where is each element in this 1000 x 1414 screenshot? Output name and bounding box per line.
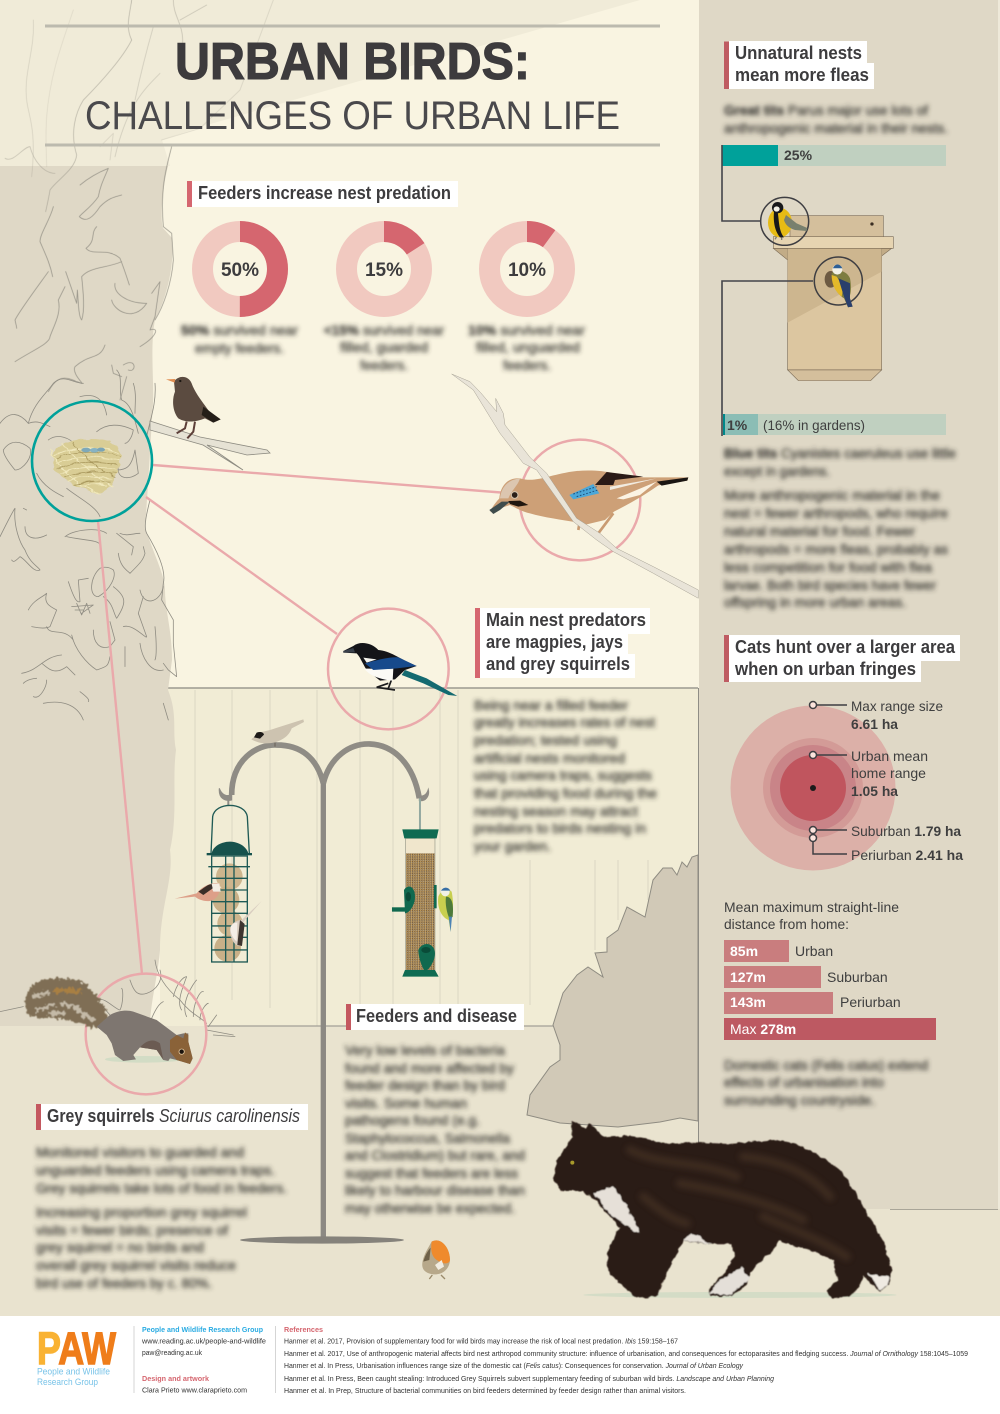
text block: references: Hanmer et al. In Prep, Structure of bacterial communities on bird feeders determined by feeder design rather than animal visitors. (284, 1388, 686, 1395)
heading: cats hunt over a larger area: Cats hunt over a larger area (735, 637, 956, 657)
text block: blue tits: arthropods = more fleas, probably as (724, 541, 948, 557)
text block: references: Hanmer et al. 2017, Use of anthropogenic material affects bird nest arthropod community structure: influence of urbanisation, and consequences for ectoparasites and fledging success. Journal of Ornithology 158:1045–1059 (284, 1351, 968, 1358)
text block: grey squirrels body: unguarded feeders using camera traps. (36, 1162, 275, 1178)
text block: references: Hanmer et al. In Press, Been caught stealing: Introduced Grey Squirrels subvert supplementary feeding of suburban wild birds. Landscape and Urban Planning (284, 1376, 774, 1383)
chart: donut 15% (346, 232, 422, 306)
chart: distance bars: 127m (730, 969, 766, 985)
text block: domestic cats: effects of urbanisation into (724, 1074, 884, 1090)
text block: grey squirrels body: overall grey squirrel visits reduce (36, 1257, 236, 1273)
heading: unnatural nests: Unnatural nests (735, 43, 862, 63)
chart: distance bars: Periurban (840, 994, 901, 1010)
heading: main title: URBAN BIRDS: (175, 33, 530, 91)
text block: predators body: artificial nests monitored (474, 750, 625, 766)
logo: PAW: PAW (37, 1323, 116, 1374)
text block: feeders and disease body: pathogens found (e.g. (345, 1112, 480, 1128)
icon: great tit (768, 202, 807, 240)
text block: predators body: your garden. (474, 838, 551, 854)
sketch lines: tree bark, lower (0, 370, 177, 720)
icon: seed tube feeder (392, 798, 453, 977)
chart labels: cat range: Urban mean (851, 748, 928, 764)
chart: donut 50%: 50% (221, 260, 259, 281)
chart labels: cat range: Periurban 2.41 ha (851, 847, 963, 863)
icon: robin (422, 1240, 450, 1279)
text block: blue tits: less competition for food with flea (724, 559, 932, 575)
footer (0, 1316, 1000, 1414)
chart labels: cat range (851, 698, 963, 863)
squirrel ring (25, 974, 206, 1094)
icon: blackbird (166, 377, 221, 438)
text block: feeders and disease body: and Clostridium) but rare, and (345, 1147, 525, 1163)
chart labels: cat range: home range (851, 765, 926, 781)
text block: references: References (284, 1327, 323, 1334)
cat fur shading (630, 1150, 847, 1257)
chart: distance bars: Suburban (827, 969, 888, 985)
text block: donut captions: 50% survived near (181, 322, 298, 338)
logo: PAW (37, 1323, 116, 1387)
chart: great tit bar 25%: 25% (784, 147, 813, 163)
text block: predators body: predation; tested using (474, 732, 617, 748)
text block: donut captions: <15% survived near (324, 322, 444, 338)
text block: great tits: Great tits Parus major use lots of (724, 102, 928, 118)
sketch lines: grass by squirrel (0, 960, 235, 1037)
chart: cat range circles (730, 702, 896, 870)
text block: predators body: that providing food during the (474, 785, 657, 801)
text block: references: Hanmer et al. 2017, Provision of supplementary food for wild birds may increase the risk of local nest predation. Ibis 159:158–167 (284, 1338, 678, 1346)
text block: donut captions: filled, guarded (340, 339, 428, 355)
heading: unnatural nests: mean more fleas (735, 65, 869, 85)
text block: grey squirrels body: bird use of feeders by c. 80%. (36, 1275, 212, 1291)
text block: blue tits: More anthropogenic material in the (724, 487, 940, 503)
chart: donut 50% (202, 232, 278, 306)
icon ring: great tit (761, 197, 809, 245)
text block: donut captions: filled, unguarded (476, 339, 580, 355)
text block: contact details (141, 1327, 266, 1394)
title block (45, 24, 660, 146)
text block: blue tits: Blue tits Cyanistes caeruleus use little (724, 445, 956, 461)
text block: feeders and disease body: visits. Some human (345, 1095, 467, 1111)
text block: domestic cats: Domestic cats (Felis catus) extend (724, 1057, 928, 1073)
chart: blue tit bar 1%: (16% in gardens) (763, 417, 865, 433)
heading: grey squirrels: Grey squirrels Sciurus carolinensis (47, 1106, 300, 1126)
text block: blue tits: offspring in more urban areas. (724, 594, 906, 610)
logo: PAW: People and Wildlife (37, 1366, 110, 1376)
text block: donut captions: feeders. (360, 357, 408, 373)
icon: grey squirrel (25, 978, 193, 1064)
heading: main nest predators: are magpies, jays (486, 632, 623, 652)
fence (160, 688, 698, 1026)
text block: domestic cats: surrounding countryside. (724, 1092, 875, 1108)
text block: references (284, 1327, 968, 1395)
chart: distance bars: 143m (730, 994, 766, 1010)
chart: distance bars: Urban (795, 943, 833, 959)
connector lines: nest to predators (98, 465, 520, 974)
text block: grey squirrels body: grey squirrel = no birds and (36, 1239, 204, 1255)
chart labels: cat range: Max range size (851, 698, 943, 714)
logo: PAW: Research Group (37, 1377, 98, 1387)
text block: feeders and disease body: Very low levels of bacteria (345, 1042, 505, 1058)
text block: grey squirrels body: Monitored visitors to guarded and (36, 1144, 244, 1160)
text block: donut captions (181, 322, 585, 373)
bird feeder pole (219, 744, 429, 1243)
chart: donut 10% (490, 232, 564, 306)
chart: distance bars: 85m (730, 943, 758, 959)
text block: feeders and disease body: may otherwise be expected. (345, 1200, 515, 1216)
text block: blue tits: natural material for food. Fewer (724, 523, 915, 539)
icon: bare branch (452, 374, 698, 598)
text block: predators body: greatly increases rates of nest (474, 714, 655, 730)
text block: domestic cats (724, 1057, 928, 1108)
text block: distance caption: distance from home: (724, 916, 849, 932)
heading: unnatural nests (724, 41, 874, 89)
text block: feeders and disease body: Staphylococcus, Salmonella (345, 1130, 510, 1146)
icon: squirrel tail (25, 978, 108, 1030)
text block: great tits (724, 102, 948, 136)
text block: distance caption (724, 899, 899, 932)
icon: blackbird branch (150, 421, 270, 470)
feeder base shadow (240, 1236, 404, 1244)
text block: grey squirrels body: visits = fewer birds; presence of (36, 1222, 228, 1238)
text block: contact details: Clara Prieto www.claraprieto.com (142, 1388, 247, 1394)
connector: 1% to blue tit (722, 281, 813, 436)
text block: blue tits: except in gardens. (724, 463, 830, 479)
text block: contact details: www.reading.ac.uk/people-and-wildlife (141, 1338, 266, 1346)
chart: distance bars (724, 940, 936, 1040)
icon: eggs (81, 448, 105, 453)
chart labels: cat range: 1.05 ha (851, 783, 898, 799)
magpie ring (328, 609, 457, 729)
icon: nest hole (825, 271, 837, 288)
sketch lines: tree bark, upper (5, 0, 273, 400)
text block: grey squirrels body: Increasing proportion grey squirrel (36, 1204, 247, 1220)
nest ring: teal circle with nest (32, 401, 152, 521)
chart labels: cat range: 6.61 ha (851, 716, 898, 732)
text block: feeders and disease body: found and more affected by (345, 1060, 514, 1076)
text block: predators body: nesting season may attract (474, 803, 638, 819)
icon ring: blue tit (814, 257, 862, 307)
text block: predators body: Being near a filled feeder (474, 697, 628, 713)
text block: grey squirrels body (36, 1144, 287, 1291)
text block: predators body (474, 697, 657, 854)
icon: jay (489, 471, 688, 533)
chart: donut 15%: 15% (365, 260, 403, 281)
icon: magpie (343, 643, 457, 696)
text block: blue tits (724, 445, 956, 610)
heading: main nest predators: Main nest predators (486, 610, 646, 630)
text block: donut captions: empty feeders. (195, 340, 284, 356)
text block: feeders and disease body: likely to harbour disease than (345, 1182, 525, 1198)
text block: feeders and disease body: suggest that feeders are less (345, 1165, 518, 1181)
icon: blue tit on feeder (438, 888, 453, 932)
cat body with fur edge (553, 1122, 891, 1297)
text block: references: Hanmer et al. In Press, Urbanisation influences range size of the domestic cat (Felis catus): Consequences for conservation. Journal of Urban Ecology (284, 1363, 743, 1370)
heading: main nest predators: and grey squirrels (486, 654, 630, 674)
text block: predators body: using camera traps, suggests (474, 767, 652, 783)
chart: distance bars: Max 278m (730, 1021, 796, 1037)
heading: feeders and disease: Feeders and disease (356, 1006, 517, 1026)
text block: donut captions: feeders. (503, 357, 551, 373)
icon: blue tit (832, 265, 853, 307)
icon: nest (50, 439, 121, 494)
text block: contact details: paw@reading.ac.uk (142, 1350, 202, 1357)
text block: blue tits: nest = fewer arthropods, who require (724, 505, 948, 521)
icon: long-tailed tit pink (175, 883, 221, 901)
text block: contact details: Design and artwork (142, 1376, 209, 1383)
chart: blue tit bar 1% (723, 414, 946, 435)
text block: donut captions: 10% survived near (468, 322, 585, 338)
icon: blackcap on hook (251, 719, 304, 747)
chart: blue tit bar 1%: 1% (727, 417, 748, 433)
heading: cats hunt over a larger area: when on urban fringes (734, 659, 916, 679)
text block: predators body: predators to birds nesting in (474, 820, 646, 836)
heading: cats hunt over a larger area (724, 635, 960, 682)
heading: subtitle: CHALLENGES OF URBAN LIFE (85, 94, 620, 138)
icon: fat ball cage feeder (175, 795, 262, 962)
text block: blue tits: larvae. Both bird species have fewer (724, 577, 936, 593)
text block: grey squirrels body: Grey squirrels take lots of food in feeders. (36, 1180, 287, 1196)
connector: 25% to great tit (722, 145, 760, 221)
icon: nest box (773, 216, 893, 381)
icon: cat (553, 1122, 897, 1298)
chart: donut 10%: 10% (508, 260, 546, 281)
heading: feeders increase nest predation: Feeders increase nest predation (198, 183, 451, 203)
chart labels: cat range: Suburban 1.79 ha (851, 823, 961, 839)
icon: long-tailed tit white (230, 901, 262, 946)
text block: feeders and disease body: feeder design than by bird (345, 1077, 505, 1093)
text block: feeders and disease body (345, 1042, 525, 1216)
tree trunk (0, 166, 176, 1026)
text block: contact details: People and Wildlife Research Group (142, 1327, 263, 1334)
bush (527, 855, 698, 1127)
chart: great tit bar 25% (722, 145, 946, 166)
text block: distance caption: Mean maximum straight-line (724, 899, 899, 915)
heading: main nest predators (475, 608, 650, 678)
text block: great tits: anthropogenic material in their nests. (724, 120, 948, 136)
jay ring and branch (452, 374, 698, 598)
heading: feeders and disease (346, 1004, 524, 1030)
